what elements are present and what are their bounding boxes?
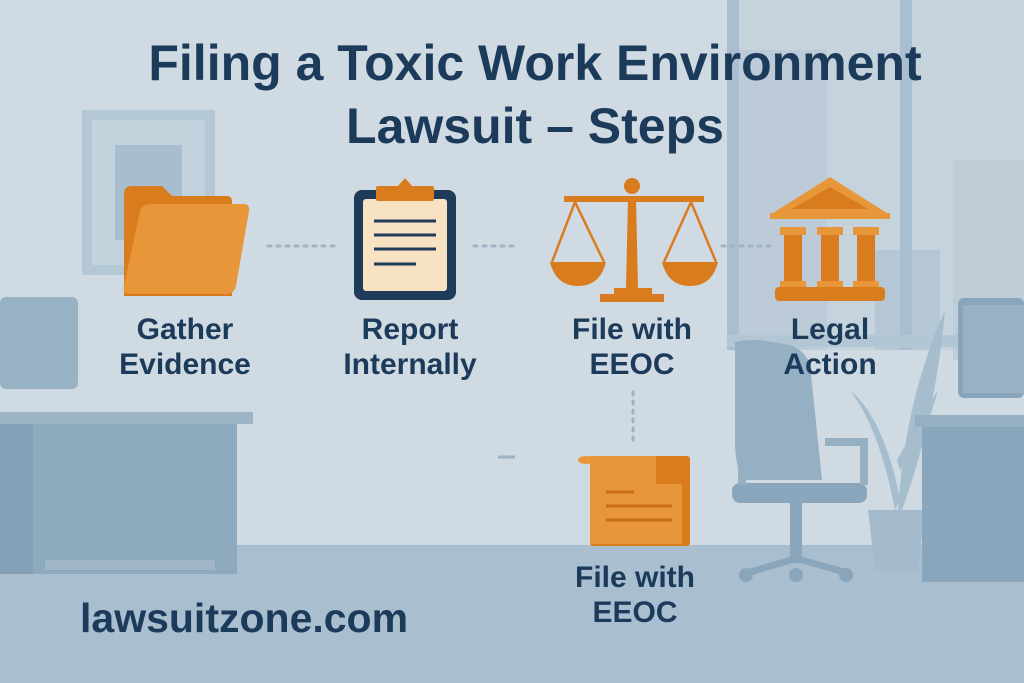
label: legal action: Legal [791,313,869,346]
label: gather evidence: Evidence [119,348,251,381]
title: Lawsuit – Steps [346,98,724,154]
icon: scales [550,178,718,302]
label: legal action [783,313,877,381]
website footer: lawsuitzone.com [80,595,408,641]
left desk [0,297,253,574]
title: Filing a Toxic Work Environment [148,35,922,91]
chair [732,340,868,582]
connectors [268,246,770,440]
plant [850,310,945,570]
label: gather evidence [119,313,251,381]
label: report internally: Internally [343,348,477,381]
floor [0,545,1024,683]
label: report internally [343,313,477,381]
title [148,35,922,154]
label: file with EEOC bottom [575,561,695,629]
icon: clipboard [354,178,456,300]
label: file with EEOC bottom: EEOC [592,596,678,629]
window [727,0,1024,360]
icon: folder [124,186,250,296]
icon: courthouse [770,177,890,301]
label: report internally: Report [362,313,458,346]
label: file with EEOC: EEOC [589,348,675,381]
label: file with EEOC: File with [572,313,692,346]
icon: document folder [578,456,690,546]
label: legal action: Action [783,348,877,381]
label: file with EEOC bottom: File with [575,561,695,594]
right desk [915,298,1024,582]
label: file with EEOC [572,313,692,381]
picture frame [82,110,215,275]
label: gather evidence: Gather [137,313,233,346]
